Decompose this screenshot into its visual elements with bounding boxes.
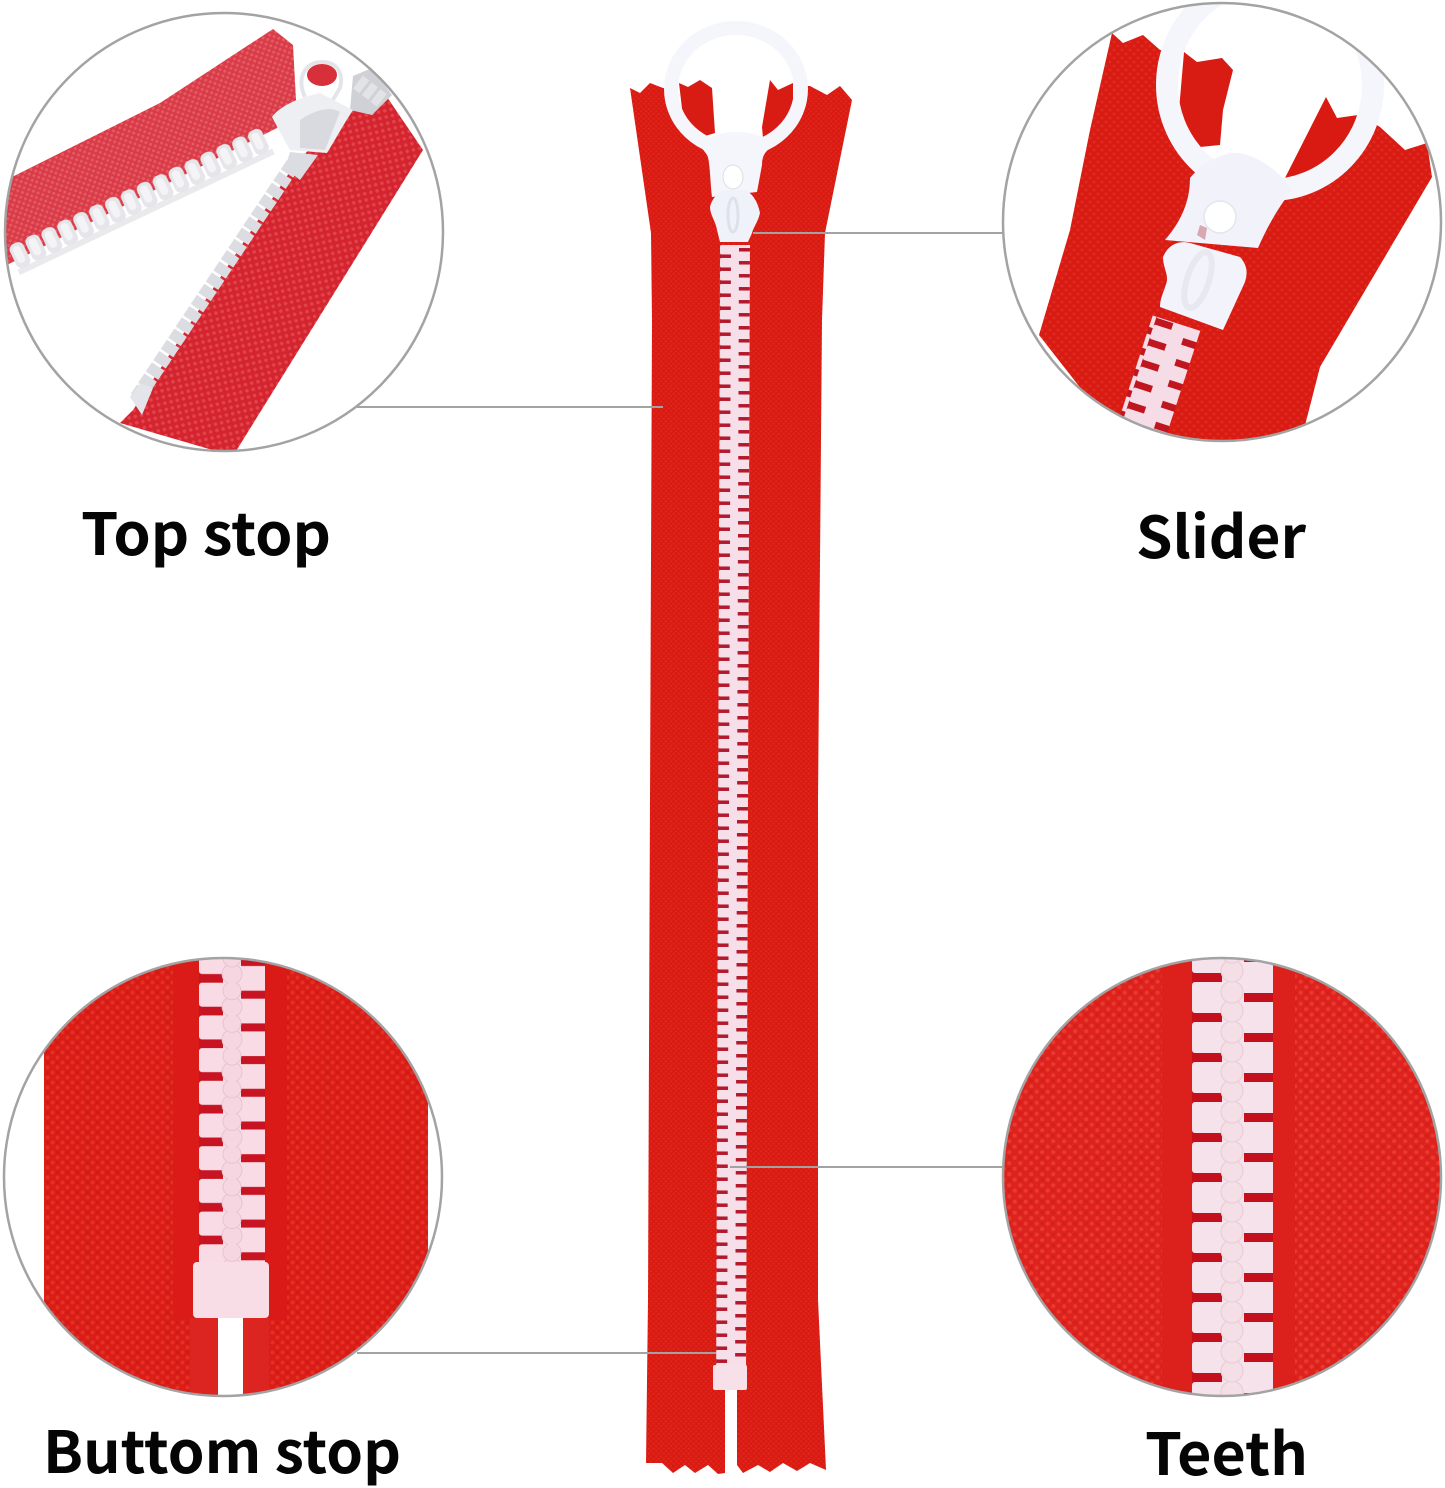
slider body (710, 190, 760, 242)
panel: slider detail circle (1003, 0, 1441, 474)
puller tab (1165, 153, 1292, 248)
gap below stop (218, 1318, 243, 1398)
panel: top stop detail circle (0, 13, 443, 456)
slider (272, 62, 392, 180)
slider body (1160, 242, 1247, 330)
label: bottom stop: Buttom stop (43, 1406, 401, 1488)
teeth (716, 245, 750, 1367)
gap (725, 1390, 737, 1474)
bottom stop (193, 1262, 269, 1318)
ring interior (666, 23, 806, 155)
label: slider: Slider (1136, 491, 1307, 575)
leader line: slider (753, 232, 1003, 234)
central zipper (630, 23, 852, 1474)
teeth (1120, 316, 1200, 433)
puller hole (723, 165, 743, 189)
back tape pieces (679, 80, 793, 138)
lower zipper teeth (137, 160, 296, 398)
lower end of teeth (130, 383, 153, 415)
lower zipper tape (120, 97, 423, 456)
panel: bottom stop detail circle (4, 950, 442, 1400)
panel: teeth detail circle (1000, 950, 1445, 1400)
puller hole (1204, 201, 1236, 233)
upper zipper teeth (6, 125, 275, 275)
leader line: teeth (730, 1166, 1003, 1168)
puller tab (697, 132, 775, 197)
fabric (1000, 950, 1445, 1400)
leader line: bottom stop (357, 1352, 716, 1354)
band beside teeth (1162, 950, 1295, 1400)
teeth (199, 950, 265, 1262)
slider loop (1182, 249, 1214, 311)
fabric (44, 950, 428, 1400)
pull ring (671, 28, 801, 150)
label: top stop: Top stop (81, 488, 331, 572)
slider ring (1167, 0, 1373, 190)
upper zipper tape (0, 29, 296, 268)
leader line: top stop (357, 406, 663, 408)
bottom stop (713, 1365, 747, 1390)
ring interior (1178, 52, 1358, 178)
zipper tape (630, 83, 852, 1474)
back tape pieces (1178, 52, 1358, 185)
band beside teeth (173, 950, 287, 1398)
slider loop (728, 198, 738, 232)
fabric tape (1039, 33, 1432, 445)
teeth (1192, 950, 1273, 1400)
